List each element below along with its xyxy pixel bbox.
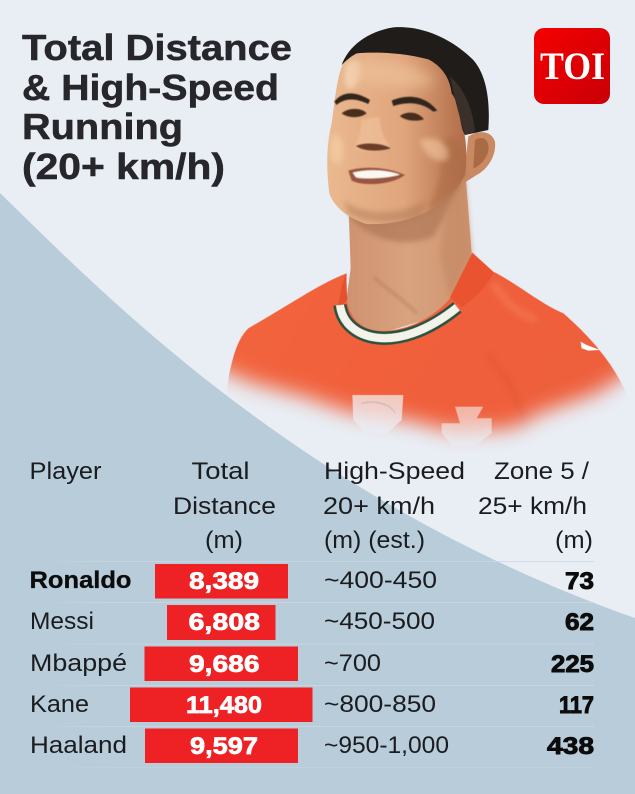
row: Kane — [30, 688, 594, 722]
row: Kane: 11,480 — [186, 692, 262, 719]
row: Messi: 62 — [565, 609, 594, 636]
row: Haaland: 9,597 — [190, 733, 258, 760]
row: Haaland — [30, 728, 594, 763]
row: Ronaldo: 8,389 — [189, 568, 259, 595]
table header: Total — [192, 458, 250, 485]
row: Kane: ~800-850 — [324, 691, 436, 718]
TOI logo: TOI — [540, 45, 605, 88]
row: Ronaldo: 73 — [565, 568, 594, 595]
row: Kane: 117 — [559, 692, 594, 719]
row: Mbappé: ~700 — [324, 650, 381, 677]
shirt — [217, 253, 635, 453]
table header: 25+ km/h — [478, 493, 587, 520]
hair — [342, 27, 489, 135]
row: Haaland: 438 — [547, 733, 594, 760]
title — [22, 27, 292, 187]
table header: 20+ km/h — [323, 493, 435, 520]
table header: Zone 5 / — [494, 458, 589, 485]
title: (20+ km/h) — [22, 146, 225, 187]
title: & High-Speed — [22, 67, 279, 108]
collar — [340, 305, 457, 338]
row: Ronaldo: Ronaldo — [30, 567, 132, 594]
TOI logo — [534, 28, 610, 104]
ear — [463, 132, 495, 183]
eyebrows and eyes — [334, 93, 437, 121]
nose — [356, 117, 390, 151]
table header: (m) — [205, 527, 243, 554]
row: Messi: 6,808 — [188, 609, 260, 636]
face — [327, 47, 466, 224]
background curved panel — [0, 193, 635, 794]
table header: High-Speed — [324, 458, 465, 485]
row: Mbappé — [30, 646, 594, 681]
row: Messi: Messi — [30, 608, 94, 635]
row: Ronaldo: ~400-450 — [324, 567, 437, 594]
mouth — [348, 168, 405, 184]
badges — [352, 395, 403, 433]
row: Haaland: Haaland — [30, 732, 127, 759]
table header: (m) — [555, 527, 593, 554]
row: Ronaldo — [30, 564, 594, 598]
row: Kane: Kane — [30, 691, 89, 718]
row: Mbappé: 225 — [551, 651, 594, 678]
row: Messi — [30, 605, 594, 640]
title: Total Distance — [22, 27, 292, 68]
neck — [346, 177, 472, 332]
title: Running — [22, 106, 183, 147]
row: Messi: ~450-500 — [324, 608, 435, 635]
row: Mbappé: Mbappé — [30, 650, 127, 677]
table header: Distance — [173, 493, 276, 520]
table header — [30, 458, 593, 554]
table header: Player — [30, 458, 102, 485]
table header: (m) (est.) — [324, 527, 425, 554]
player photo illustration — [217, 27, 635, 453]
row: Haaland: ~950-1,000 — [324, 732, 449, 759]
row: Mbappé: 9,686 — [189, 651, 260, 678]
data table — [30, 458, 594, 768]
